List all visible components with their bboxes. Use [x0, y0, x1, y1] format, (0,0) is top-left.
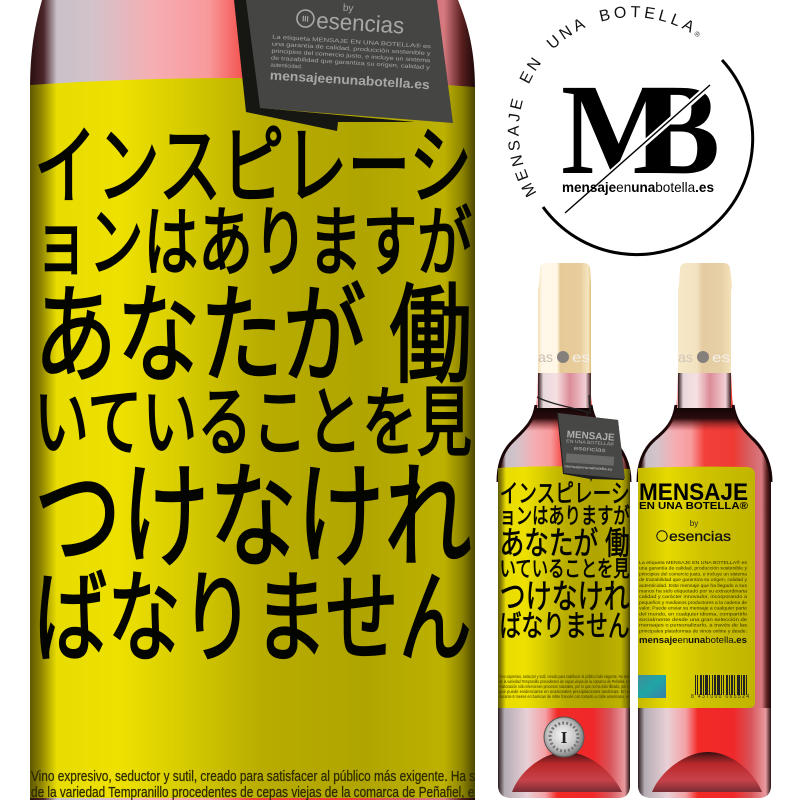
front yellow label [498, 466, 630, 708]
front hanging tag: mensajeenunabotella.es [564, 464, 612, 472]
large hanging tag [234, 0, 453, 131]
back label title: MENSAJE [639, 479, 748, 506]
back yellow label [638, 467, 755, 708]
barcode [691, 685, 749, 700]
logo monogram B: B [640, 58, 720, 202]
logo white slash [560, 80, 716, 218]
front capsule [538, 263, 591, 373]
large Japanese message: ョンはありますが [34, 201, 472, 286]
back bottle glass [638, 372, 771, 798]
front label small print: elaboración sólo intervienen procesos naturales, por lo que no ha sido filtrado, por lo [499, 684, 631, 689]
large bottle close-up [30, 0, 491, 800]
large Japanese message [34, 119, 472, 675]
tag face [246, 0, 453, 123]
front bottle punt [512, 752, 622, 792]
front label small print: Vino expresivo, seductor y sutil, creado para satisfacer al público más exigente. Ha sido [499, 674, 631, 679]
large label description text [31, 769, 491, 800]
logo circle arc [543, 60, 753, 255]
back shoulder shadow [638, 405, 771, 482]
back capsule logo: es [712, 349, 730, 365]
back label body text: manos ha sido etiquetado por su extraordinaria [639, 588, 747, 594]
brand logo [508, 6, 754, 256]
large Japanese message: いていることを見 [34, 381, 472, 466]
back capsule logo [678, 349, 730, 365]
large Japanese message: ばなりません [34, 563, 472, 675]
tag brand text: esencias [316, 7, 405, 39]
back label body text: autenticidad. Este mensaje que ha llegado a sus [639, 583, 748, 588]
front hanging tag [557, 413, 625, 482]
tag brand text [269, 0, 434, 92]
back label body text: principales plataformas de vinos online y desde: [639, 628, 747, 633]
back lower glass [638, 708, 771, 798]
front lower glass [498, 708, 630, 798]
back label body text: La etiqueta MENSAJE EN UNA BOTELLA® es [639, 559, 748, 565]
front neck base shadow [524, 408, 604, 431]
front label small print: durante 6 meses en barricas de roble francés con tostado a roble americano, es [499, 694, 630, 699]
logo text guide [519, 17, 727, 193]
award seal [544, 717, 584, 757]
front shoulder shadow [498, 405, 630, 482]
large bottle glass [30, 0, 475, 800]
large yellow label [30, 78, 475, 798]
tag brand text: una garantía de calidad, producción sostenible y [272, 42, 431, 57]
barcode: 8 437000 065524 [691, 694, 749, 700]
tag shadow backing [234, 0, 415, 131]
front bottle glass [498, 372, 630, 798]
award seal: I [561, 728, 568, 747]
front hanging tag: MENSAJE [566, 429, 615, 444]
back label body text: valor. Puede enviar su mensaje a cualquier parte [639, 606, 747, 611]
back bottle [638, 263, 771, 798]
front Japanese message: ばなりません [500, 610, 630, 643]
back label url: mensajeenunabotella.es [639, 635, 747, 646]
front Japanese message: つけなけれ [500, 578, 630, 616]
front bottle neck [538, 372, 591, 410]
logo black slash [565, 85, 710, 213]
front label small print: de la variedad Tempranillo procedentes de cepas viejas de la comarca de Peñafiel, en [499, 679, 631, 684]
back bottle punt [652, 752, 762, 792]
front label small print [499, 674, 631, 699]
logo monogram M: M [561, 58, 679, 202]
front capsule logo: es [572, 349, 590, 365]
front Japanese message: インスピレーシ [500, 480, 630, 508]
front Japanese message: いていることを見 [500, 556, 630, 581]
back label body text: mensajes o personalizarlo, a través de las [639, 623, 748, 628]
tag brand text: autenticidad. [270, 62, 303, 70]
front bottle [498, 263, 631, 798]
hologram sticker [638, 675, 666, 698]
tag brand text: de trazabilidad que garantiza su origen, calidad y [271, 55, 430, 71]
back label body text: socialmente desde una gran selección de [639, 617, 748, 622]
tag brand text: by [343, 3, 354, 14]
back bottle neck [678, 372, 731, 410]
back label body text: calidad y carácter innovador, incorporando a [639, 594, 748, 599]
back label by esencias: by [690, 519, 698, 528]
back label body text: principios del comercio justo, e incluye un sistema [639, 571, 747, 576]
front Japanese message: ョンはありますが [500, 504, 630, 529]
logo arc text: MENSAJE EN UNA BOTELLA® [508, 6, 700, 198]
back capsule logo: as [678, 349, 693, 365]
large Japanese message: つけなけれ [34, 454, 472, 582]
back label body text: una garantía de calidad, producción sostenible y [639, 566, 748, 571]
large Japanese message: あなたが 働 [34, 275, 472, 396]
front hanging tag: EN UNA BOTELLA® [566, 437, 615, 447]
front label small print: que puede evidenciarse en ocasionales precipitaciones tanáricas. En el [499, 689, 630, 694]
back label body text [639, 559, 748, 633]
logo url: mensajeenunabotella.es [562, 179, 714, 195]
tag brand text: III [302, 14, 309, 24]
back label by esencias [657, 519, 731, 544]
front tag string [537, 395, 590, 424]
back capsule [678, 263, 732, 373]
tag brand text: mensajeenunabotella.es [269, 67, 430, 92]
back neck base shadow [664, 408, 745, 431]
front hanging tag: esencias [573, 446, 606, 454]
front capsule logo [538, 349, 590, 365]
tag brand text: principios del comercio justo, e incluye un sistema [271, 48, 431, 64]
front Japanese message: あなたが 働 [500, 525, 630, 561]
large label description text: Vino expresivo, seductor y sutil, creado para satisfacer al público más exigente. Ha sido [31, 769, 491, 785]
back label title: EN UNA BOTELLA® [639, 500, 748, 512]
large Japanese message: インスピレーシ [34, 119, 472, 215]
tag brand text: La etiqueta MENSAJE EN UNA BOTELLA® es [272, 34, 431, 50]
back label body text: del mundo, en cualquier idioma, compartirlo [639, 611, 748, 616]
back label by esencias: esencias [669, 528, 731, 544]
back label body text: pequeños y medianos productores a la cadena de [639, 600, 747, 605]
front capsule logo: as [538, 349, 553, 365]
front Japanese message [500, 480, 630, 643]
back label body text: de trazabilidad que garantiza su origen, calidad y [639, 577, 748, 582]
